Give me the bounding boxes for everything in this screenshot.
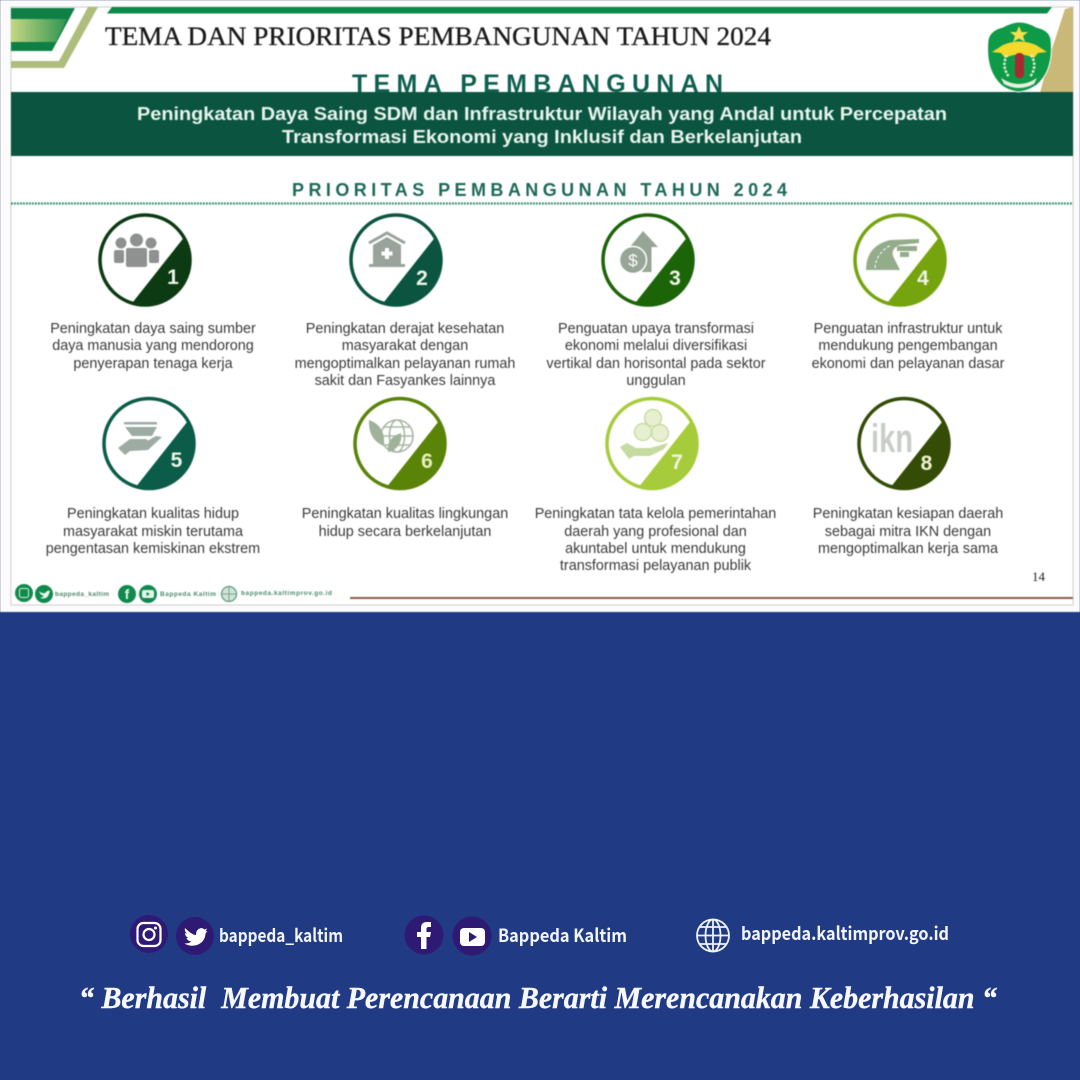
text 1: penyerapan tenaga kerja	[73, 356, 233, 372]
badge 8	[859, 398, 950, 490]
slide footer social strip: bappeda.kaltimprov.go.id	[241, 590, 332, 597]
priority 1	[50, 215, 256, 372]
icon: instagram	[130, 915, 168, 953]
slide footer social strip: bappeda_kaltim	[55, 591, 109, 598]
priority 7	[535, 398, 776, 574]
text 1: Peningkatan daya saing sumber	[50, 321, 256, 337]
badge 5: 5	[171, 449, 183, 472]
badge 5	[104, 398, 195, 490]
text 5: pengentasan kemiskinan ekstrem	[46, 541, 260, 557]
label: Bappeda Kaltim: Bappeda Kaltim	[498, 922, 627, 948]
text 4: mendukung pengembangan	[818, 338, 998, 354]
icon: twitter	[176, 917, 214, 955]
text 7: daerah yang profesional dan	[564, 524, 747, 540]
badge 7	[607, 398, 698, 490]
icon: facebook	[404, 916, 444, 954]
badge 2	[351, 215, 442, 306]
heading: prioritas pembangunan: PRIORITAS PEMBANGUNAN TAHUN 2024	[292, 180, 787, 200]
badge 3	[603, 215, 694, 306]
header chevron decoration	[11, 7, 98, 68]
text 4: ekonomi dan pelayanan dasar	[812, 356, 1005, 372]
slide footer social strip: Bappeda Kaltim	[160, 591, 216, 598]
text 7: transformasi pelayanan publik	[560, 558, 752, 574]
text 5: Peningkatan kualitas hidup	[67, 506, 239, 522]
text 3: ekonomi melalui diversifikasi	[565, 338, 747, 354]
badge 4	[855, 215, 946, 306]
label: website: bappeda.kaltimprov.go.id	[741, 920, 949, 946]
badge 8: ikn	[871, 417, 913, 461]
text 3: Penguatan upaya transformasi	[558, 321, 754, 337]
text 7: akuntabel untuk mendukung	[565, 541, 746, 557]
bottom social links	[130, 915, 949, 956]
text 8: sebagai mitra IKN dengan	[825, 524, 991, 540]
theme banner	[11, 92, 1073, 156]
text 7: Peningkatan tata kelola pemerintahan	[535, 506, 776, 522]
slide page number: 14	[1032, 569, 1046, 584]
text 2: sakit dan Fasyankes lainnya	[315, 373, 495, 389]
text 2: masyarakat dengan	[342, 338, 468, 354]
text 2: Peningkatan derajat kesehatan	[306, 321, 504, 337]
badge 3: 3	[669, 267, 681, 290]
slide footer social strip: f	[125, 586, 130, 602]
slide panel	[0, 0, 1080, 612]
badge 3: $	[628, 251, 638, 270]
badge 6: 6	[421, 450, 433, 473]
text 8: Peningkatan kesiapan daerah	[813, 506, 1003, 522]
slide title: TEMA DAN PRIORITAS PEMBANGUNAN TAHUN 2024	[105, 21, 771, 51]
priority 3	[546, 215, 766, 389]
priority 4	[812, 215, 1005, 372]
text 3: vertikal dan horisontal pada sektor	[546, 356, 766, 372]
tagline: “ Berhasil Membuat Perencanaan Berarti Merencanakan Keberhasilan “	[79, 980, 997, 1015]
text 2: mengoptimalkan pelayanan rumah	[295, 356, 515, 372]
heading: tema pembangunan: TEMA PEMBANGUNAN	[352, 70, 723, 98]
badge 7: 7	[671, 451, 683, 474]
icon: globe	[697, 920, 729, 952]
badge 4: 4	[917, 267, 929, 290]
text 3: unggulan	[626, 373, 686, 389]
badge 1: 1	[167, 266, 179, 289]
badge 8: 8	[921, 452, 933, 475]
badge 1	[100, 215, 191, 306]
priority 5	[46, 398, 260, 557]
text 5: masyarakat miskin terutama	[63, 524, 243, 540]
slide footer social strip	[15, 584, 332, 603]
theme banner: Peningkatan Daya Saing SDM dan Infrastruktur Wilayah yang Andal untuk Percepatan	[137, 104, 947, 124]
gold corner shape	[1040, 7, 1073, 93]
icon: youtube	[452, 916, 492, 956]
text 4: Penguatan infrastruktur untuk	[814, 321, 1003, 337]
label: bappeda_kaltim: bappeda_kaltim	[219, 922, 343, 948]
priority 6	[302, 398, 508, 540]
text 6: Peningkatan kualitas lingkungan	[302, 506, 508, 522]
priority 8	[813, 398, 1003, 557]
theme banner: Transformasi Ekonomi yang Inklusif dan Berkelanjutan	[282, 127, 802, 147]
text 6: hidup secara berkelanjutan	[319, 524, 491, 540]
text 8: mengoptimalkan kerja sama	[818, 541, 998, 557]
priority 2	[295, 215, 515, 389]
badge 2: 2	[416, 267, 428, 290]
text 1: daya manusia yang mendorong	[52, 338, 254, 354]
header green bar	[107, 7, 1052, 14]
icon: provincial shield logo	[988, 22, 1051, 92]
badge 6	[355, 398, 446, 490]
